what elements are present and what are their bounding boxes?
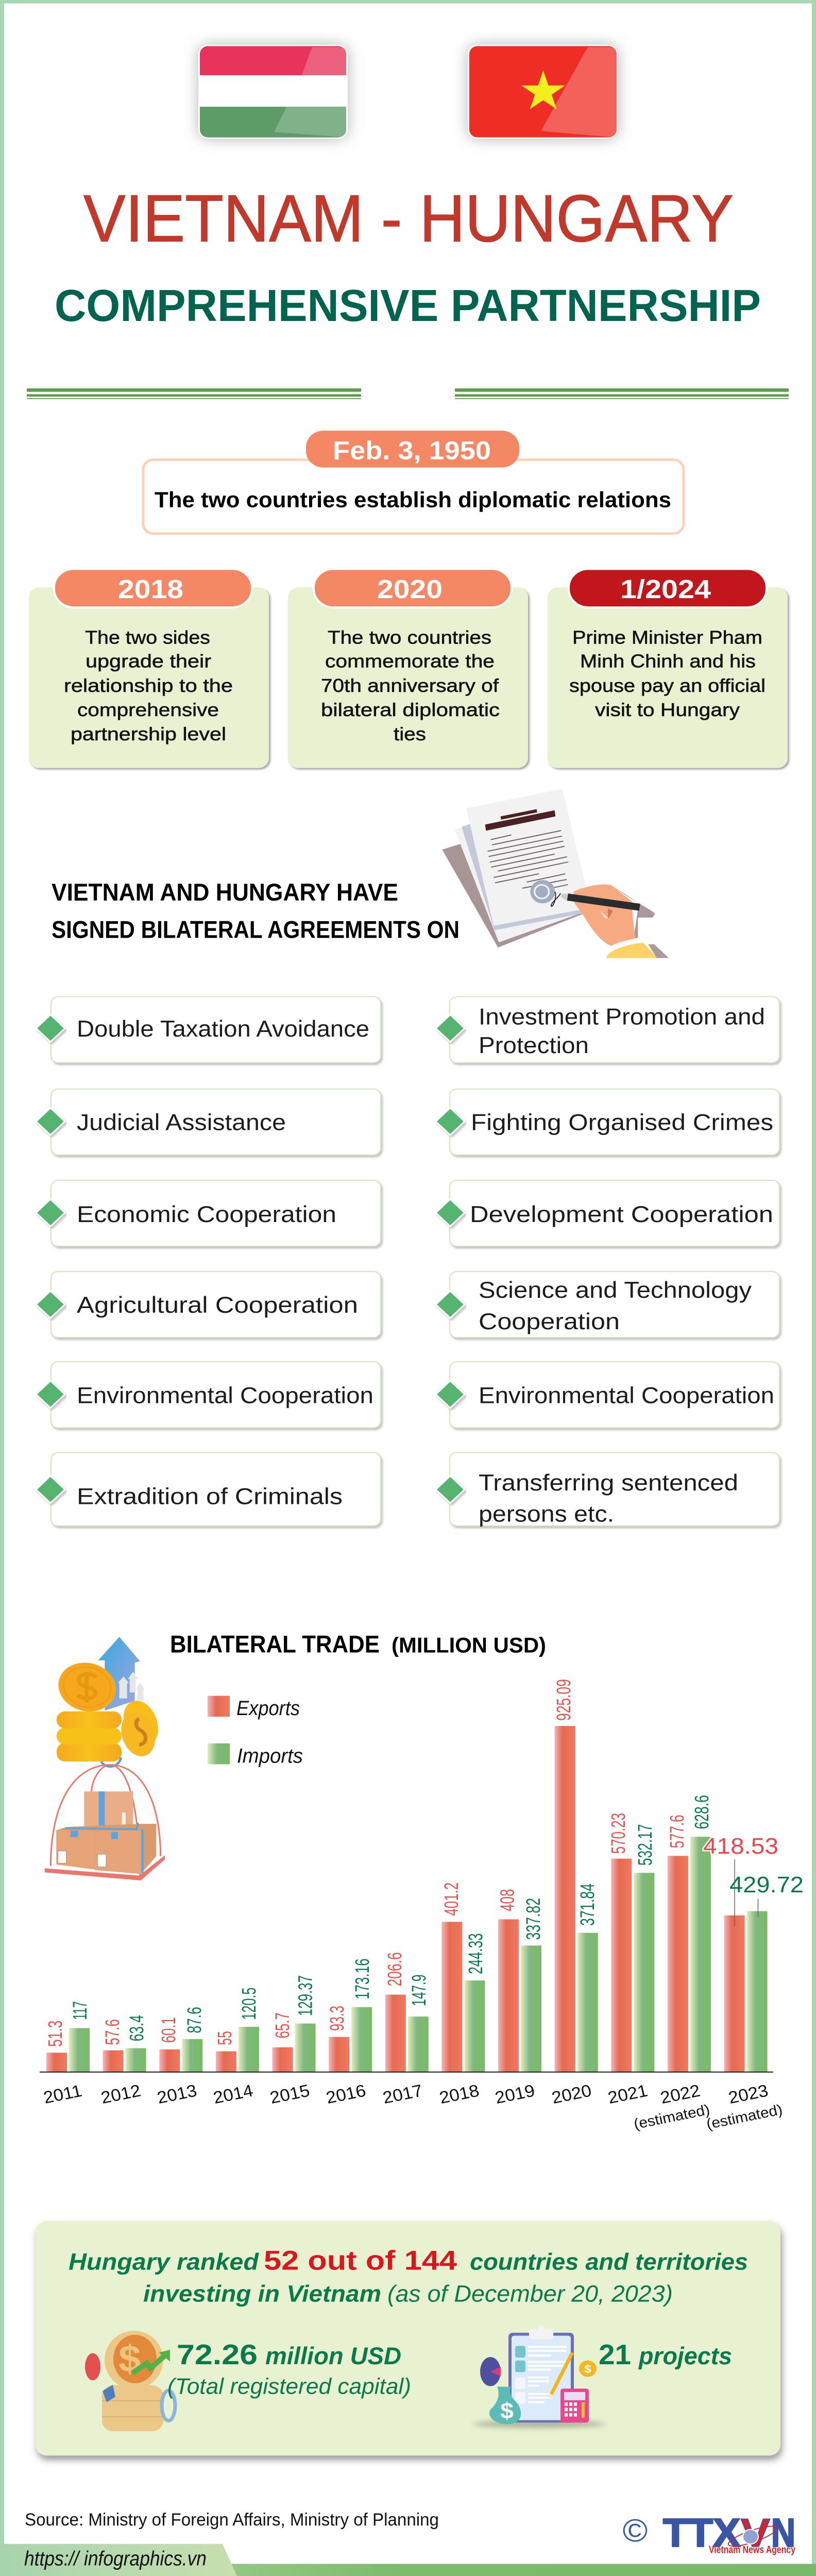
- investment capital value: million USD: [265, 2343, 401, 2370]
- bars 2017: 206.6: [384, 1952, 405, 1987]
- heading: bilateral trade: (MILLION USD): [392, 1634, 546, 1657]
- item: Double Taxation Avoidance: Double Taxation Avoidance: [77, 1016, 369, 1042]
- axis: year labels: 2011: [42, 2081, 84, 2108]
- item: Extradition of Criminals: Extradition of Criminals: [77, 1484, 343, 1509]
- axis: year labels: 2013: [156, 2081, 199, 2108]
- year pill 2018: 2018: [118, 575, 183, 604]
- icon: coin stack: $: [118, 2337, 141, 2380]
- bars 2022: [666, 1795, 712, 2072]
- panel: agreements list: [36, 997, 779, 1527]
- bars 2022: 577.6: [666, 1815, 688, 1848]
- icon: clipboard with money: [473, 2325, 605, 2428]
- panel: 1/2024: [548, 569, 788, 768]
- axis: year labels: 2020: [550, 2081, 593, 2108]
- text 2018: The two sides: [85, 628, 210, 648]
- bars 2017: 147.9: [408, 1975, 430, 2006]
- icon: coins and cargo: [45, 1637, 165, 1880]
- axis: year labels: (estimated): [705, 2102, 784, 2132]
- investment headline: (as of December 20, 2023): [387, 2281, 673, 2307]
- text 2018: partnership level: [71, 724, 226, 744]
- bars 2021: [607, 1813, 656, 2072]
- text 1/2024: visit to Hungary: [595, 700, 740, 720]
- website url: https:// infographics.vn: [24, 2547, 207, 2570]
- bars 2020: 371.84: [576, 1884, 598, 1926]
- bars 2016: [326, 1958, 373, 2072]
- axis: year labels: (estimated): [632, 2102, 711, 2132]
- investment capital value: 72.26: [177, 2339, 258, 2370]
- investment headline: 52 out of 144: [264, 2245, 457, 2276]
- item: Transferring sentenced persons etc.: [436, 1452, 779, 1527]
- item: Judicial Assistance: [36, 1089, 381, 1155]
- bars 2012: 63.4: [126, 2015, 147, 2041]
- legend: imports: [208, 1743, 303, 1767]
- legend: imports: Imports: [237, 1744, 303, 1767]
- item: Investment Promotion and Protection: Protection: [479, 1032, 589, 1058]
- icon: hand signing document: [442, 789, 669, 958]
- bars 2018: [440, 1883, 486, 2072]
- axis: year labels: 2019: [494, 2081, 537, 2108]
- bars 2013: 60.1: [158, 2017, 179, 2043]
- panel: 2020: [288, 569, 528, 768]
- text 2018: upgrade their: [86, 651, 211, 671]
- text 2020: bilateral diplomatic: [321, 700, 500, 720]
- bars 2023: [703, 1834, 804, 2072]
- axis: year labels: 2022: [659, 2081, 702, 2108]
- text 2018: comprehensive: [77, 700, 219, 720]
- axis: year labels: 2021: [606, 2081, 650, 2108]
- bars 2019: 337.82: [522, 1898, 544, 1940]
- axis: year labels: [42, 2081, 784, 2132]
- item: Environmental Cooperation (right): [436, 1362, 779, 1428]
- bars 2021: 570.23: [607, 1813, 629, 1854]
- icon: coin stack: [85, 2331, 175, 2431]
- subtitle: COMPREHENSIVE PARTNERSHIP: [55, 280, 761, 331]
- investment projects value: [599, 2339, 732, 2370]
- item: Science and Technology Cooperation: Science and Technology: [479, 1277, 752, 1303]
- item: Development Cooperation: [436, 1180, 779, 1246]
- axis: year labels: 2015: [268, 2081, 312, 2108]
- bars 2017: [384, 1952, 430, 2072]
- panel: 2018: [29, 569, 269, 768]
- text 2018: [64, 628, 233, 744]
- logo: TTXVN Vietnam News Agency: ©: [623, 2513, 648, 2549]
- milestone text: The two countries establish diplomatic relations: [155, 488, 671, 512]
- logo: TTXVN Vietnam News Agency: TTX: [663, 2511, 740, 2555]
- text 1/2024: Minh Chinh and his: [580, 651, 756, 671]
- item: Investment Promotion and Protection: [436, 997, 779, 1063]
- item: Environmental Cooperation (left): [36, 1362, 381, 1428]
- bars 2014: [214, 1988, 260, 2072]
- legend: exports: Exports: [236, 1697, 300, 1720]
- bars 2012: 57.6: [101, 2019, 123, 2045]
- item: Fighting Organised Crimes: Fighting Organised Crimes: [471, 1110, 773, 1135]
- logo: TTXVN Vietnam News Agency: [623, 2511, 795, 2556]
- text 2020: The two countries: [328, 628, 491, 648]
- heading: signed agreements: SIGNED BILATERAL AGREEMENTS ON: [52, 917, 460, 943]
- investment headline: Hungary ranked: [69, 2249, 260, 2275]
- heading: bilateral trade: [170, 1631, 546, 1658]
- text 2020: 70th anniversary of: [321, 675, 499, 696]
- source: Source: Ministry of Foreign Affairs, Ministry of Planning: [25, 2510, 439, 2530]
- bar chart: exports and imports by year: [40, 1679, 804, 2132]
- panel: Feb. 3, 1950 milestone: [143, 431, 684, 534]
- item: Judicial Assistance: Judicial Assistance: [77, 1110, 286, 1135]
- axis: year labels: 2018: [438, 2081, 481, 2108]
- year pill 1/2024: 1/2024: [620, 575, 711, 604]
- item: Science and Technology Cooperation: [436, 1272, 779, 1337]
- text 2018: relationship to the: [64, 675, 233, 696]
- bars 2021: 532.17: [634, 1824, 656, 1866]
- item: Agricultural Cooperation: Agricultural Cooperation: [77, 1292, 358, 1318]
- investment capital value: (Total registered capital): [167, 2375, 411, 2399]
- heading: signed agreements: [52, 879, 460, 943]
- bars 2015: [271, 1975, 316, 2072]
- heading: bilateral trade: BILATERAL TRADE: [170, 1631, 380, 1658]
- bars 2023: 418.53: [703, 1834, 778, 1859]
- bars 2012: [101, 2015, 147, 2072]
- year pill 2020: [314, 569, 512, 607]
- axis: year labels: 2012: [99, 2081, 143, 2108]
- bars 2016: 173.16: [351, 1958, 373, 1999]
- text 2020: commemorate the: [325, 651, 495, 671]
- axis: year labels: 2023: [727, 2081, 770, 2108]
- item: Science and Technology Cooperation: Cooperation: [479, 1309, 620, 1334]
- investment headline: [69, 2245, 748, 2307]
- bars 2020: 925.09: [553, 1679, 574, 1721]
- text 2020: [321, 628, 500, 744]
- bars 2015: 129.37: [295, 1975, 316, 2016]
- item: Development Cooperation: Development Cooperation: [470, 1201, 773, 1227]
- bars 2011: [44, 2001, 91, 2072]
- bars 2016: 93.3: [326, 2006, 348, 2031]
- text 2020: ties: [394, 724, 426, 744]
- item: Transferring sentenced persons etc.: persons etc.: [479, 1501, 614, 1527]
- item: Transferring sentenced persons etc.: Transferring sentenced: [479, 1470, 738, 1496]
- item: Double Taxation Avoidance: [36, 997, 381, 1063]
- investment projects value: projects: [638, 2343, 732, 2370]
- axis: year labels: 2016: [325, 2081, 368, 2108]
- text 1/2024: Prime Minister Pham: [572, 628, 762, 648]
- investment capital value: [167, 2339, 411, 2399]
- date pill: Feb. 3, 1950: [333, 436, 491, 465]
- bars 2019: 408: [497, 1889, 518, 1911]
- axis: year labels: 2014: [212, 2081, 255, 2108]
- icon: Vietnam flag: [468, 45, 618, 139]
- investment headline: investing in Vietnam: [143, 2281, 381, 2307]
- legend: [208, 1696, 303, 1767]
- bars 2020: [553, 1679, 598, 2072]
- bars 2018: 401.2: [440, 1883, 462, 1916]
- item: Economic Cooperation: [36, 1180, 381, 1246]
- item: Fighting Organised Crimes: [436, 1089, 779, 1155]
- year pill 2018: [54, 569, 252, 607]
- heading: signed agreements: VIETNAM AND HUNGARY HAVE: [52, 879, 398, 906]
- bars 2013: 87.6: [183, 2007, 205, 2033]
- panel: investment: [36, 2221, 780, 2455]
- bars 2019: [497, 1889, 544, 2072]
- item: Environmental Cooperation (right): Environmental Cooperation: [479, 1383, 774, 1408]
- bars 2015: 65.7: [271, 2012, 293, 2039]
- footer bar: [0, 2544, 816, 2576]
- date pill: [306, 431, 519, 467]
- bars 2013: [158, 2007, 205, 2072]
- logo: TTXVN Vietnam News Agency: V: [741, 2511, 770, 2555]
- logo: TTXVN Vietnam News Agency: N: [771, 2511, 795, 2555]
- legend: exports: [208, 1696, 300, 1720]
- bars 2011: 117: [69, 2001, 91, 2020]
- item: Investment Promotion and Protection: Investment Promotion and: [479, 1004, 765, 1029]
- year pill 1/2024: [569, 569, 767, 607]
- bars 2023: 429.72: [729, 1873, 804, 1897]
- investment headline: countries and territories: [470, 2249, 748, 2275]
- icon: Hungary flag: [198, 45, 348, 139]
- bars 2011: 51.3: [44, 2021, 66, 2047]
- investment projects value: 21: [599, 2339, 631, 2370]
- item: Extradition of Criminals: [36, 1452, 381, 1526]
- item: Economic Cooperation: Economic Cooperation: [77, 1201, 336, 1227]
- bars 2014: 120.5: [238, 1988, 260, 2020]
- bars 2014: 55: [214, 2031, 235, 2045]
- title: VIETNAM - HUNGARY: [83, 182, 734, 256]
- axis: year labels: 2017: [381, 2081, 424, 2108]
- year pill 2020: 2020: [377, 575, 443, 604]
- bars 2022: 628.6: [691, 1795, 712, 1829]
- icon: clipboard with money: $: [584, 2363, 591, 2376]
- text 1/2024: spouse pay an official: [569, 675, 766, 696]
- item: Environmental Cooperation (left): Environmental Cooperation: [77, 1383, 373, 1408]
- bars 2018: 244.33: [465, 1933, 486, 1974]
- icon: clipboard with money: $: [500, 2399, 514, 2424]
- text 1/2024: [569, 628, 766, 720]
- item: Agricultural Cooperation: [36, 1272, 381, 1337]
